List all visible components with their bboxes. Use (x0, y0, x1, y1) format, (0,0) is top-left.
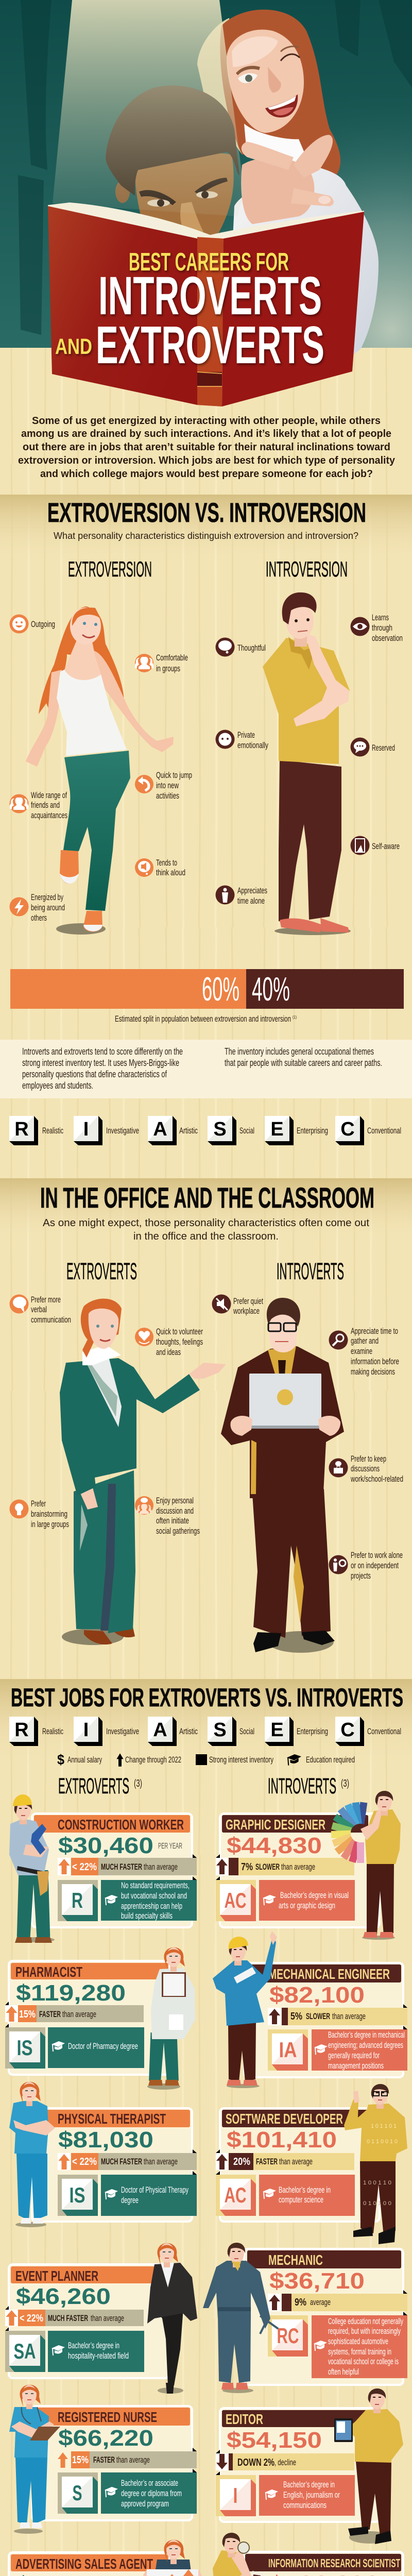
legend: RIASEC themes repeated: Enterprising (297, 1727, 328, 1736)
job growth row: SLOWER (306, 2012, 330, 2021)
trait: quick to jump: into new (156, 781, 179, 790)
trait: self-aware (350, 836, 400, 855)
bar chart: 60/40 population split: 40% (252, 970, 290, 1008)
legend: RIASEC themes: R (14, 1118, 29, 1140)
education required: build specialty skills (121, 1911, 173, 1921)
legend: RIASEC themes repeated (9, 1717, 401, 1746)
education required: apprenticeship can help (121, 1902, 182, 1911)
legend: card symbols: $ (57, 1752, 64, 1768)
legend: RIASEC themes: Artistic (179, 1126, 198, 1136)
salary: $119,280 (16, 1980, 126, 2006)
illustration: man peeking over book (106, 86, 239, 242)
figure: information research scientist (213, 2533, 264, 2576)
card: advertising sales agent (5, 2552, 169, 2576)
job growth row (58, 2149, 197, 2175)
education required: Doctor of Pharmacy degree (68, 2042, 138, 2051)
job growth row: < 22% (20, 2313, 43, 2324)
card: mechanic (244, 2249, 407, 2385)
legend: card symbols: Education required (306, 1755, 355, 1765)
trait: prefer brainstorming: in large groups (31, 1520, 69, 1529)
title (55, 248, 324, 375)
card: information research scientist (244, 2552, 407, 2576)
intro text: and which college majors would best prepare someone for each job? (40, 468, 373, 480)
trait: appreciates time alone: Appreciates (237, 886, 267, 895)
job growth row (58, 1854, 197, 1880)
column heading: extroverts with footnote: (3) (134, 1778, 142, 1789)
salary: $46,260 (16, 2284, 111, 2309)
trait: reserved: Reserved (372, 743, 395, 753)
job growth row: than average (62, 2010, 96, 2019)
column heading: extroverts with footnote: EXTROVERTS (58, 1774, 129, 1799)
education required: but vocational school and (121, 1891, 187, 1901)
job growth row: than average (144, 2157, 178, 2166)
interest code (268, 2315, 308, 2357)
job growth row (5, 2002, 144, 2027)
trait: tends to think aloud: Tends to (156, 858, 177, 868)
education required: arts or graphic design (279, 1901, 335, 1910)
trait: thoughtful (215, 638, 266, 656)
job growth row: DOWN 2% (237, 2457, 274, 2468)
text: EXTROVERTS (66, 1258, 137, 1284)
column heading: introverts with footnote: INTROVERTS (268, 1774, 336, 1799)
card: mechanical engineer (244, 1963, 407, 2077)
job growth row (216, 1854, 354, 1880)
legend: card symbols: Strong interest inventory (209, 1755, 274, 1765)
trait: learns through observation (350, 613, 403, 643)
intro text: among us are drained by such interactions. And it’s likely that a lot of people (21, 428, 391, 439)
trait: private emotionally: Private (237, 731, 255, 740)
job growth row: MUCH FASTER (101, 2157, 142, 2166)
figure: graphic designer with swatch fan (331, 1791, 401, 1940)
legend: RIASEC themes: Investigative (106, 1126, 139, 1136)
legend: RIASEC themes repeated: C (340, 1719, 355, 1741)
subheading: As one might expect, those personality characteristics often come out (43, 1217, 369, 1229)
column heading: introverts with footnote: (3) (341, 1778, 349, 1789)
education required: often helpful (328, 2367, 359, 2377)
legend: RIASEC themes repeated: A (153, 1719, 167, 1741)
trait: outgoing: Outgoing (31, 620, 55, 629)
legend: RIASEC themes repeated: S (213, 1719, 227, 1741)
job growth row: than average (116, 2455, 150, 2465)
trait: wide range of friends: friends and (31, 801, 60, 810)
trait: wide range of friends (9, 791, 67, 820)
trait: appreciates time alone: time alone (237, 896, 265, 906)
job growth row: than average (144, 1862, 178, 1872)
legend: RIASEC themes repeated: R (14, 1719, 29, 1741)
legend: RIASEC themes (9, 1116, 401, 1145)
trait: prefer to work alone (329, 1551, 403, 1581)
trait: thoughtful: Thoughtful (237, 643, 266, 653)
legend: RIASEC themes repeated: Investigative (106, 1727, 139, 1736)
legend: card symbols: Annual salary (67, 1755, 102, 1765)
salary: $54,150 (227, 2428, 322, 2453)
column heading: introverts with footnote (268, 1774, 349, 1799)
education required (101, 1880, 197, 1921)
education required: degree or diploma from (121, 2489, 182, 2498)
interest code (58, 2472, 98, 2514)
illustration: open red book (48, 202, 364, 406)
trait: prefer to keep discussions work related: Prefer to keep (351, 1454, 386, 1464)
legend: RIASEC themes: Enterprising (297, 1126, 328, 1136)
job title: CONSTRUCTION WORKER (58, 1817, 184, 1833)
figure: introverted man (263, 592, 351, 935)
intro text (18, 415, 396, 480)
education required (259, 2175, 355, 2216)
interest code: IA (279, 2038, 297, 2062)
trait: prefer to keep discussions work related: discussions (351, 1464, 380, 1473)
trait: energized: Energized by (31, 893, 63, 902)
card: editor (216, 2408, 380, 2522)
trait: prefer quiet workplace: Prefer quiet (233, 1297, 263, 1306)
trait: prefer brainstorming: brainstorming (31, 1510, 67, 1519)
job title: ADVERTISING SALES AGENT (15, 2556, 153, 2572)
job growth row: < 22% (72, 2156, 97, 2167)
job growth row: FASTER (39, 2010, 61, 2019)
interest code (216, 2475, 256, 2516)
legend: RIASEC themes: E (270, 1118, 284, 1140)
text: EXTROVERSION (68, 557, 152, 581)
figure: construction worker (9, 1794, 55, 1943)
legend: RIASEC themes repeated: I (83, 1719, 89, 1741)
job growth row: 5% (290, 2011, 302, 2022)
traits: extroversion (9, 614, 192, 923)
text band: strong interest inventory: personality questions that define characteristics of (22, 1069, 167, 1079)
trait: wide range of friends: acquaintances (31, 811, 67, 820)
subheading (43, 1217, 369, 1242)
education required: approved program (121, 2499, 169, 2509)
trait: prefer more verbal communication: Prefer more (31, 1295, 61, 1304)
job growth row (216, 2149, 354, 2175)
interest code: AC (225, 1888, 246, 1912)
trait: quick to volunteer: Quick to volunteer (156, 1327, 203, 1336)
illustration: woman pointing (197, 10, 379, 371)
trait: prefer more verbal communication (9, 1294, 71, 1325)
text band: strong interest inventory (0, 1040, 412, 1098)
trait: private emotionally (215, 730, 269, 750)
text band: strong interest inventory: Introverts and extroverts tend to score differently on the (22, 1046, 183, 1057)
job growth row (268, 2290, 407, 2315)
trait: appreciate time to gather: gather and (351, 1336, 379, 1346)
education required: computer science (279, 2195, 323, 2205)
trait: outgoing (9, 614, 55, 634)
interest code: S (72, 2481, 82, 2505)
trait: enjoy personal discussion: often initiate (156, 1516, 189, 1526)
job title: EVENT PLANNER (15, 2268, 98, 2284)
legend: RIASEC themes repeated: E (270, 1719, 284, 1741)
job growth row: FASTER (93, 2455, 115, 2465)
job growth row (5, 2306, 144, 2331)
education required: management positions (328, 2061, 384, 2071)
education required (101, 2472, 197, 2514)
figure: man in brown suit with laptop (221, 1298, 344, 1653)
education required: Doctor of Physical Therapy (121, 2185, 188, 2195)
education required: No standard requirements, (121, 1881, 190, 1890)
education required (259, 2475, 355, 2516)
trait: wide range of friends: Wide range of (31, 791, 67, 800)
interest code (5, 2331, 45, 2372)
bar chart: 60/40 population split: 60% (202, 970, 239, 1008)
trait: prefer quiet workplace (212, 1294, 263, 1316)
trait: quick to jump: Quick to jump (156, 771, 192, 780)
trait: appreciate time to gather: examine (351, 1347, 372, 1356)
card: physical therapist (32, 2108, 197, 2222)
trait: comfortable in groups: in groups (156, 664, 180, 673)
job growth row: , decline (274, 2458, 296, 2467)
job title: EDITOR (226, 2411, 263, 2427)
education required: Bachelor’s degree in (68, 2341, 119, 2350)
card: registered nurse (32, 2406, 197, 2520)
intro text: extroversion or introversion. Which jobs are best for which type of personality (18, 455, 396, 466)
figure: software developer with binary code: 0 1 1 0 0 1 0 (367, 2139, 398, 2145)
job growth row: 15% (19, 2009, 36, 2020)
figure: extroverted woman (26, 606, 174, 935)
job title: PHYSICAL THERAPIST (58, 2111, 166, 2127)
salary: $36,710 (269, 2268, 365, 2294)
job growth row: FASTER (256, 2157, 278, 2166)
trait: quick to jump (135, 771, 192, 801)
interest code (268, 2029, 308, 2071)
trait: quick to volunteer: thoughts, feelings (156, 1337, 203, 1347)
trait: quick to volunteer: and ideas (156, 1348, 181, 1357)
education required: English, journalism or (283, 2490, 340, 2500)
education required (312, 2029, 407, 2071)
trait: enjoy personal discussion: Enjoy personal (156, 1496, 194, 1505)
salary: $81,030 (58, 2127, 153, 2153)
salary: $82,100 (269, 1982, 365, 2008)
education required: generally required for (328, 2051, 380, 2060)
legend: RIASEC themes: Realistic (42, 1126, 63, 1136)
card: event planner (5, 2264, 169, 2378)
card: construction worker (32, 1814, 197, 1927)
education required: Bachelor’s degree in (283, 2480, 335, 2489)
figure: advertising sales agent with rising arrows sign (143, 2540, 202, 2576)
salary: $66,220 (58, 2426, 153, 2451)
job title: MECHANIC (268, 2252, 323, 2268)
interest code: RC (277, 2324, 299, 2348)
figure: pharmacist (147, 1947, 195, 2090)
education required: hospitality-related field (68, 2351, 129, 2361)
column heading: extroverts with footnote (58, 1774, 142, 1799)
figure: event planner (147, 2243, 197, 2394)
figure: registered nurse (9, 2385, 60, 2534)
interest code: IS (69, 2183, 85, 2207)
figure: physical therapist (9, 2082, 55, 2227)
traits: introversion (215, 613, 403, 906)
job growth row (216, 2450, 354, 2475)
trait: prefer to work alone: projects (351, 1571, 371, 1581)
chart caption: Estimated split in population between extroversion and introversion (115, 1014, 291, 1024)
title: BEST CAREERS FOR (129, 248, 289, 276)
interest code: R (72, 1888, 83, 1912)
job growth row: than average (279, 2157, 313, 2166)
job growth row: 7% (241, 1861, 253, 1873)
education required: degree (121, 2196, 139, 2205)
legend: card symbols: Change through 2022 (125, 1755, 181, 1765)
header illustration (0, 0, 412, 406)
salary: $30,460 (58, 1833, 153, 1858)
trait: quick to jump: activities (156, 791, 179, 801)
trait: prefer quiet workplace: workplace (233, 1307, 260, 1316)
legend: RIASEC themes: Social (239, 1126, 254, 1136)
figure: software developer with binary code (344, 2084, 407, 2244)
trait: self-aware: Self-aware (372, 842, 400, 851)
job growth row: 15% (72, 2454, 89, 2466)
job growth row: 20% (233, 2156, 250, 2167)
trait: prefer brainstorming (9, 1499, 69, 1529)
figure: woman in teal suit (60, 1299, 226, 1645)
trait: energized (9, 893, 65, 923)
teal curtain backdrop (0, 0, 412, 348)
trait: quick to volunteer (135, 1327, 203, 1357)
interest code (5, 2027, 45, 2069)
education required (259, 1880, 355, 1921)
education required: Bachelor’s degree in (279, 2185, 331, 2195)
card: construction worker: PER YEAR (158, 1842, 182, 1851)
education required (48, 2331, 144, 2372)
job growth row: average (310, 2298, 331, 2307)
interest code (58, 2175, 98, 2216)
interest code: IS (16, 2036, 33, 2060)
education required: Bachelor’s degree in visual (280, 1891, 349, 1900)
salary: $44,830 (227, 1833, 322, 1858)
trait: prefer to keep discussions work related (329, 1454, 403, 1484)
legend: RIASEC themes: S (213, 1118, 227, 1140)
legend: RIASEC themes: C (340, 1118, 355, 1140)
job growth row: than average (332, 2012, 366, 2021)
legend: RIASEC themes: I (83, 1118, 89, 1140)
spotlight (53, 0, 244, 216)
trait: comfortable in groups (135, 653, 188, 673)
salary: $101,410 (227, 2127, 337, 2153)
job title: SOFTWARE DEVELOPER (226, 2111, 343, 2127)
legend: RIASEC themes repeated: Realistic (42, 1727, 63, 1736)
text band: strong interest inventory: employees and students. (22, 1080, 93, 1091)
job growth row: MUCH FASTER (101, 1862, 142, 1872)
interest code (216, 1880, 256, 1921)
trait: prefer brainstorming: Prefer (31, 1499, 46, 1509)
traits: introverts at work (212, 1294, 403, 1581)
job title: REGISTERED NURSE (58, 2409, 157, 2425)
footnote marker: (1) (293, 1015, 297, 1020)
job growth row: < 22% (72, 1861, 97, 1873)
trait: appreciate time to gather (329, 1327, 399, 1377)
job title: PHARMACIST (15, 1964, 82, 1980)
trait: energized: being around (31, 903, 65, 912)
job growth row: than average (91, 2314, 124, 2323)
trait: learns through observation: through (372, 623, 392, 633)
legend: RIASEC themes: A (153, 1118, 167, 1140)
trait: energized: others (31, 913, 47, 923)
trait: comfortable in groups: Comfortable (156, 653, 188, 663)
interest code: AC (225, 2183, 246, 2207)
job growth row: 9% (295, 2297, 306, 2308)
trait: appreciates time alone (215, 885, 267, 906)
card: graphic designer (216, 1814, 380, 1927)
trait: prefer more verbal communication: verbal (31, 1305, 47, 1314)
subheading: in the office and the classroom. (133, 1231, 279, 1242)
education required (101, 2175, 197, 2216)
job growth row (268, 2004, 407, 2029)
card: pharmacist (5, 1961, 169, 2075)
card: software developer (216, 2108, 380, 2222)
education required: communications (283, 2501, 327, 2510)
intro text: Some of us get energized by interacting with other people, while others (32, 415, 381, 427)
trait: prefer more verbal communication: communication (31, 1315, 71, 1325)
trait: tends to think aloud (135, 858, 185, 877)
job growth row: than average (281, 1862, 315, 1872)
trait: enjoy personal discussion: discussion and (156, 1506, 194, 1516)
figure: software developer with binary code: 1 0 0 1 1 0 (363, 2180, 391, 2186)
interest code (58, 1880, 98, 1921)
legend: RIASEC themes repeated: Social (239, 1727, 254, 1736)
figure: mechanic (203, 2243, 278, 2393)
legend: RIASEC themes repeated: Artistic (179, 1727, 198, 1736)
text band: strong interest inventory: strong interest inventory test. It uses Myers-Briggs-like (22, 1058, 179, 1068)
bar chart: 60/40 population split (10, 969, 404, 1024)
interest code: I (233, 2483, 238, 2507)
education required (48, 2027, 144, 2068)
figure: editor with tablet (334, 2388, 403, 2544)
job growth row (58, 2448, 197, 2472)
trait: reserved (350, 738, 395, 756)
job growth row: SLOWER (255, 1862, 280, 1872)
job title: GRAPHIC DESIGNER (226, 1817, 325, 1833)
interest code (216, 2175, 256, 2216)
trait: tends to think aloud: think aloud (156, 868, 185, 877)
trait: enjoy personal discussion (135, 1496, 200, 1536)
figure: software developer with binary code: 0 1 0 1 0 0 (363, 2200, 391, 2207)
subheading: What personality characteristics distinguish extroversion and introversion? (54, 531, 358, 541)
legend: card symbols (57, 1752, 355, 1768)
title: AND (55, 334, 92, 359)
trait: enjoy personal discussion: social gatherings (156, 1527, 200, 1536)
trait: private emotionally: emotionally (237, 741, 269, 750)
education required: Bachelor’s or associate (121, 2479, 178, 2488)
interest code: SA (13, 2339, 36, 2363)
figure: mechanical engineer (213, 1931, 277, 2088)
education required (312, 2315, 407, 2378)
job growth row: MUCH FASTER (48, 2314, 88, 2323)
traits: extroverts at work (9, 1294, 203, 1536)
figure: software developer with binary code: 1 0 1 1 0 1 (371, 2123, 397, 2129)
intro text: out there are in jobs that aren’t suitable for their natural inclinations toward (23, 442, 390, 453)
trait: learns through observation: Learns (372, 613, 389, 622)
